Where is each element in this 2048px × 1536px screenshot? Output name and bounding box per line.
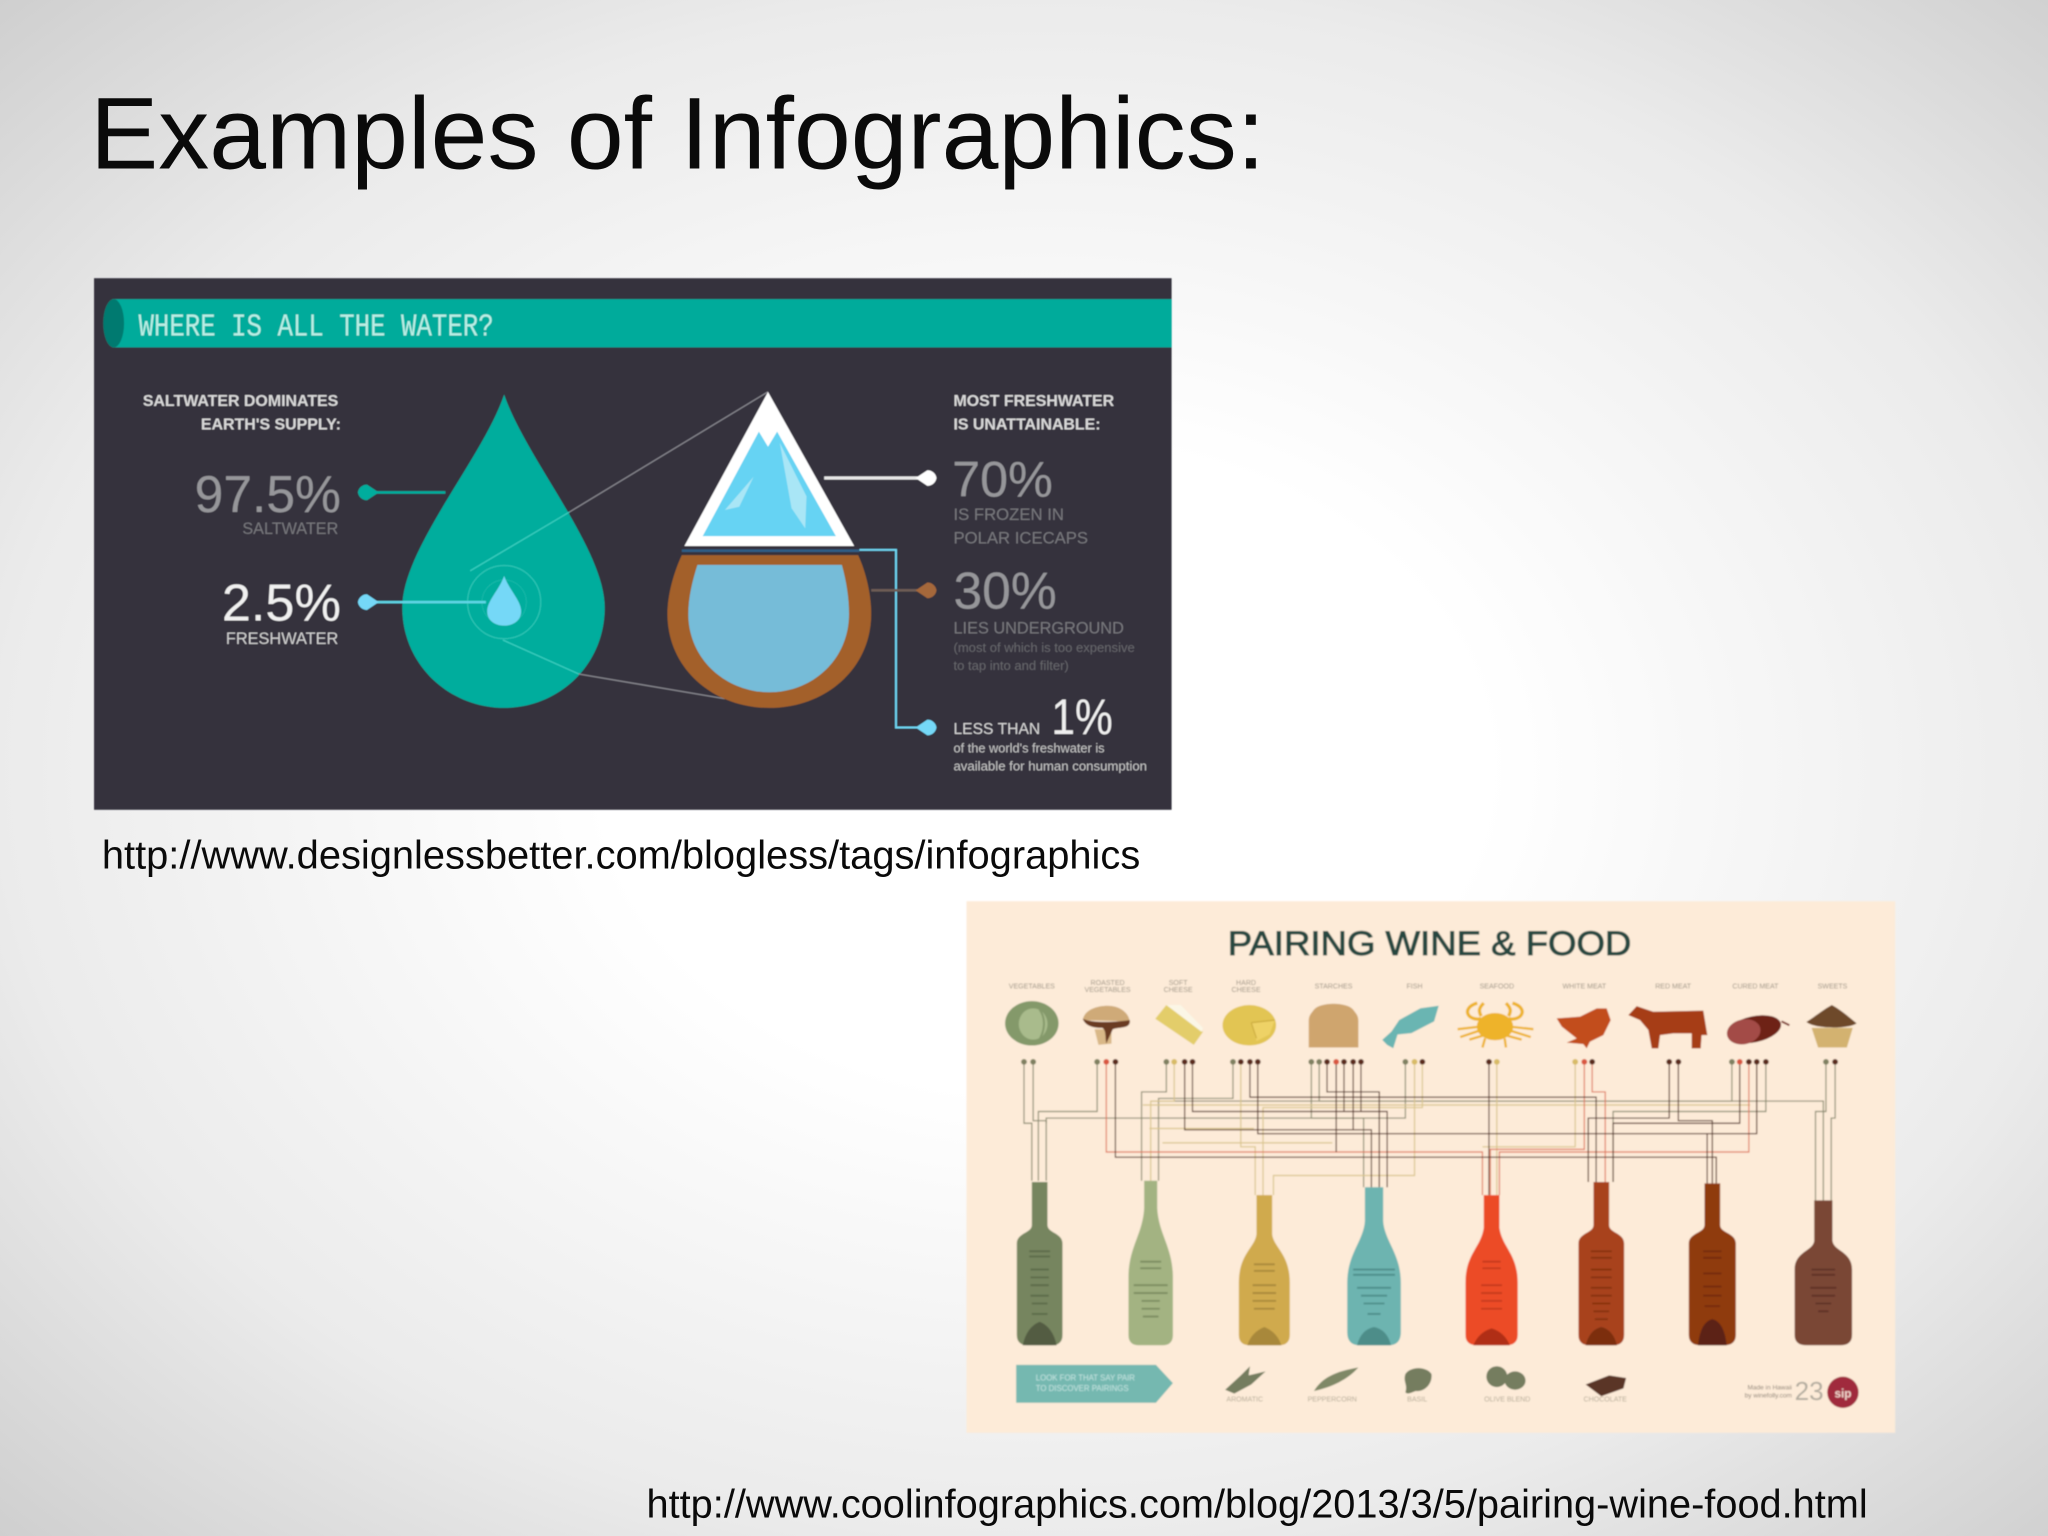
credit logo <box>1745 1376 1859 1408</box>
icon: soft cheese wedge <box>1155 1005 1203 1045</box>
connector: 1 percent line <box>682 550 921 728</box>
food category labels: WHITE MEAT <box>1562 984 1607 991</box>
marker: freshwater <box>358 594 486 610</box>
ingredient labels <box>1226 1396 1627 1403</box>
icon: chocolate <box>1586 1375 1626 1396</box>
food category labels: SEAFOOD <box>1480 984 1514 991</box>
stat: less than 1%: LESS THAN <box>953 721 1040 738</box>
food category labels: CHEESE <box>1232 987 1261 994</box>
stat: 70% frozen <box>952 450 1088 547</box>
saltwater heading line 2: EARTH'S SUPPLY: <box>201 417 341 434</box>
caption: wine source url: http://www.coolinfographics.com/blog/2013/3/5/pairing-wine-food.html <box>647 1483 1868 1527</box>
food category labels: VEGETABLES <box>1009 984 1055 991</box>
stat: 97.5% saltwater: SALTWATER <box>242 520 338 538</box>
icon: large teal water drop <box>402 394 605 708</box>
stat: 70% frozen: IS FROZEN IN <box>953 505 1064 524</box>
panel background <box>967 901 1895 1433</box>
bottle 5 <box>1465 1195 1518 1345</box>
heading band: WHERE IS ALL THE WATER? <box>138 311 494 346</box>
credit logo: sip <box>1834 1388 1851 1401</box>
icon: chicken <box>1557 1008 1611 1048</box>
arrow callout <box>1016 1365 1173 1403</box>
stat: 2.5% freshwater: 2.5% <box>222 574 341 632</box>
stat: less than 1%: of the world's freshwater is <box>953 740 1105 755</box>
wine chart title: PAIRING WINE & FOOD <box>1228 925 1631 963</box>
panel: where is all the water <box>94 278 1172 810</box>
icon: mushroom <box>1083 1006 1130 1045</box>
food category labels: SWEETS <box>1818 984 1848 991</box>
food category labels: ROASTED <box>1091 980 1125 987</box>
icon: herbs <box>1225 1366 1266 1394</box>
caption: water source url: http://www.designlessbetter.com/blogless/tags/infographics <box>102 834 1140 878</box>
bottle 1 <box>1017 1182 1063 1345</box>
panel: pairing wine and food <box>967 901 1895 1433</box>
food category labels: FISH <box>1406 984 1423 991</box>
food category labels: HARD <box>1236 980 1256 987</box>
credit logo: Made in Hawaii <box>1747 1385 1793 1392</box>
ingredient labels: AROMATIC <box>1226 1396 1263 1403</box>
icon: bread <box>1309 1004 1358 1048</box>
food category labels: VEGETABLES <box>1085 987 1131 994</box>
stat: less than 1% <box>953 689 1147 774</box>
bottle 7 <box>1689 1183 1736 1345</box>
icon: cow <box>1628 1006 1707 1048</box>
stat: 30% underground: LIES UNDERGROUND <box>953 619 1124 637</box>
icon: crab <box>1458 1003 1533 1048</box>
marker: 30 percent <box>871 583 936 598</box>
marker: saltwater <box>358 485 445 500</box>
connector lines to iceberg <box>468 392 768 699</box>
saltwater heading: SALTWATER DOMINATES <box>143 393 338 410</box>
bottle 3 <box>1239 1195 1290 1345</box>
icon: hard cheese <box>1223 1005 1276 1046</box>
icon: underground water bowl <box>667 555 871 708</box>
icon: iceberg <box>684 392 854 546</box>
arrow callout: TO DISCOVER PAIRINGS <box>1036 1384 1129 1393</box>
ingredient labels: CHOCOLATE <box>1584 1396 1627 1403</box>
food category labels: STARCHES <box>1315 984 1353 991</box>
stat: 30% underground: to tap into and filter) <box>953 658 1069 673</box>
stat: less than 1%: 1% <box>1051 689 1113 745</box>
food category labels: CURED MEAT <box>1732 984 1779 991</box>
food category labels: SOFT <box>1169 980 1188 987</box>
icon: muffin <box>1806 1005 1857 1048</box>
ingredient labels: OLIVE BLEND <box>1484 1396 1530 1403</box>
ingredient labels: PEPPERCORN <box>1308 1396 1357 1403</box>
stat: less than 1%: available for human consumption <box>953 759 1147 774</box>
icon: small freshwater drop <box>487 576 521 626</box>
stat: 30% underground: 30% <box>953 562 1057 620</box>
arrow callout: LOOK FOR THAT SAY PAIR <box>1036 1374 1135 1383</box>
icon: sausage <box>1724 1011 1789 1048</box>
bottle 6 <box>1578 1182 1624 1345</box>
stat: 30% underground <box>953 562 1135 673</box>
stat: 70% frozen: POLAR ICECAPS <box>953 528 1088 547</box>
panel background <box>94 278 1172 810</box>
credit logo: 23 <box>1795 1376 1824 1406</box>
icon: fish <box>1382 1006 1439 1048</box>
icon: vegetables cabbage <box>1005 1001 1059 1046</box>
bottle 4 <box>1347 1187 1401 1345</box>
freshwater heading line 2: IS UNATTAINABLE: <box>953 417 1101 434</box>
connector dots <box>1021 1059 1838 1065</box>
bottle 8 <box>1795 1200 1852 1345</box>
freshwater heading: MOST FRESHWATER <box>953 393 1115 410</box>
stat: 97.5% saltwater: 97.5% <box>195 465 341 523</box>
bottle 2 <box>1128 1181 1173 1345</box>
icon: olives <box>1486 1366 1526 1390</box>
credit logo: by winefolly.com <box>1745 1393 1792 1400</box>
stat: 2.5% freshwater: FRESHWATER <box>226 630 339 648</box>
icon: basil <box>1405 1368 1432 1393</box>
marker: 70 percent <box>824 470 936 486</box>
heading band <box>103 299 1172 347</box>
food category labels <box>1009 980 1848 994</box>
connector wires from foods to wines <box>1024 1064 1835 1200</box>
stat: 70% frozen: 70% <box>952 450 1053 507</box>
title: Examples of Infographics: <box>90 76 1265 190</box>
icon: pepper <box>1314 1368 1358 1391</box>
stat: 30% underground: (most of which is too expensive <box>953 640 1135 655</box>
ingredient labels: BASIL <box>1407 1396 1427 1403</box>
food category labels: CHEESE <box>1164 987 1193 994</box>
food category labels: RED MEAT <box>1655 984 1692 991</box>
marker: 1 percent <box>916 720 936 735</box>
